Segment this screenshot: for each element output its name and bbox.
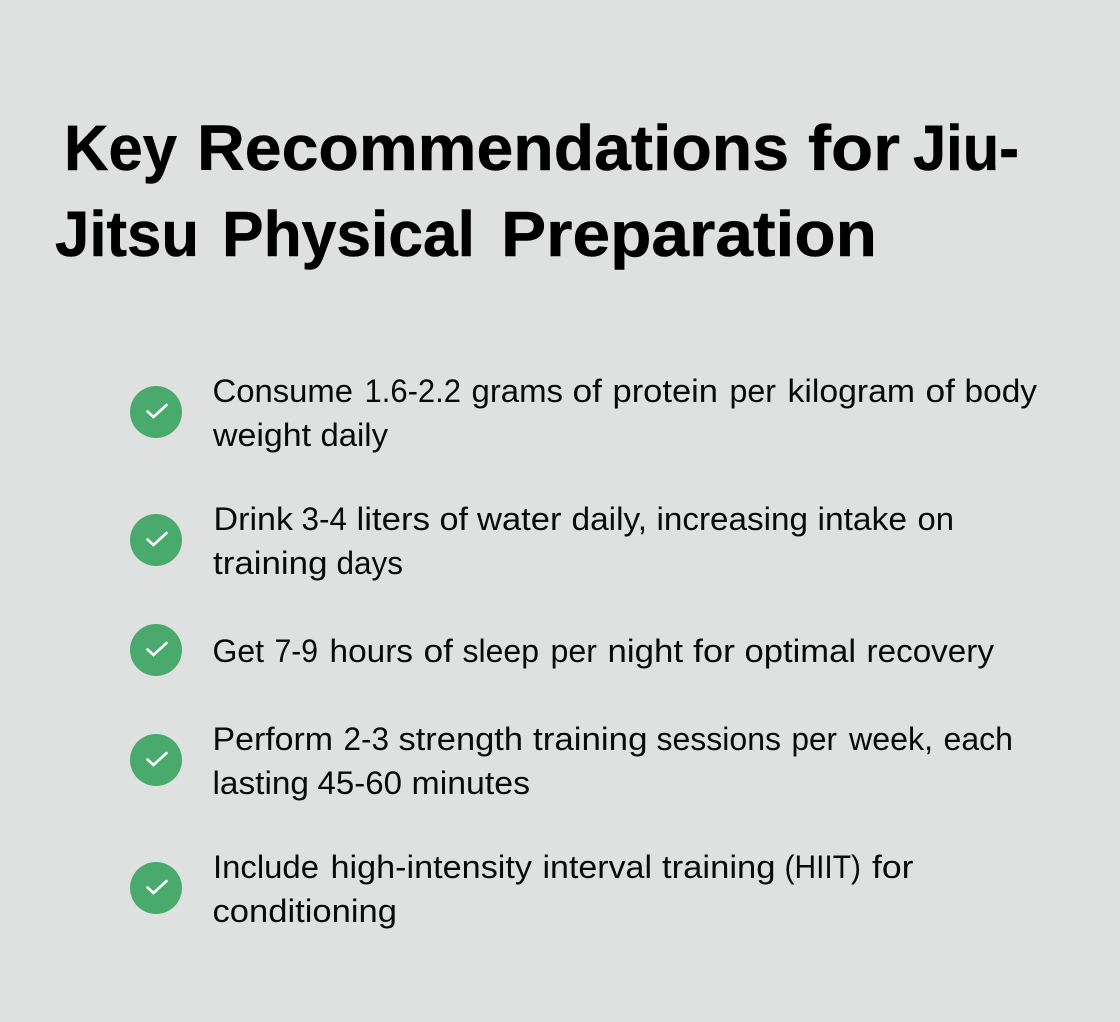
item: strength training: each	[944, 721, 1013, 757]
item: water: water	[476, 501, 562, 537]
item: protein	[130, 373, 1037, 453]
item: water: 3-4	[302, 501, 347, 537]
item: sleep: night	[608, 633, 683, 669]
item: strength training: per	[792, 721, 837, 757]
item: strength training: strength	[398, 721, 523, 757]
item: HIIT: conditioning	[212, 893, 397, 929]
item: strength training: training	[533, 721, 648, 757]
item: strength training: week,	[848, 721, 933, 757]
item: strength training: lasting	[212, 765, 309, 801]
item: protein: of	[926, 373, 955, 409]
title: Key	[64, 112, 177, 184]
item: water: on	[918, 501, 954, 537]
item: HIIT: interval	[542, 849, 652, 885]
item: sleep: hours	[330, 633, 413, 669]
item: protein: daily	[320, 417, 388, 453]
title: Preparation	[501, 198, 877, 270]
item: strength training: sessions	[656, 721, 781, 757]
item: protein: per	[730, 373, 776, 409]
item: strength training: 2-3	[344, 721, 389, 757]
item: water: intake	[818, 501, 907, 537]
title	[55, 112, 1019, 270]
item: water: days	[336, 545, 403, 581]
item: protein: weight	[212, 417, 311, 453]
item: sleep: 7-9	[274, 633, 318, 669]
item: HIIT: training	[662, 849, 776, 885]
item: sleep: sleep	[462, 633, 539, 669]
item: strength training: 45-60	[318, 765, 402, 801]
item: water: liters	[356, 501, 430, 537]
item: sleep: of	[424, 633, 453, 669]
item: water: of	[440, 501, 468, 537]
item: water: daily,	[572, 501, 647, 537]
item: strength training: minutes	[412, 765, 530, 801]
item: HIIT	[130, 849, 914, 929]
item: strength training	[130, 721, 1013, 801]
item: water: Drink	[214, 501, 294, 537]
title: for	[808, 112, 900, 184]
title: Recommendations	[197, 112, 789, 184]
item: strength training: Perform	[212, 721, 333, 757]
item: protein: kilogram	[788, 373, 915, 409]
item: sleep	[130, 624, 994, 676]
item: sleep: for	[693, 633, 735, 669]
item: sleep: per	[550, 633, 597, 669]
checklist	[130, 373, 1037, 929]
item: sleep: recovery	[866, 633, 994, 669]
title: Jitsu	[55, 198, 199, 270]
item: protein: 1.6-2.2	[364, 373, 461, 409]
item: protein: of	[572, 373, 602, 409]
item: sleep: Get	[212, 633, 264, 669]
item: HIIT: Include	[213, 849, 319, 885]
item: water: increasing	[656, 501, 808, 537]
item: HIIT: high-intensity	[330, 849, 532, 885]
item: HIIT: (HIIT)	[784, 849, 861, 885]
item: protein: Consume	[212, 373, 353, 409]
item: protein: body	[964, 373, 1037, 409]
item: HIIT: for	[872, 849, 914, 885]
title: Jiu-	[913, 112, 1019, 184]
item: protein: protein	[612, 373, 718, 409]
item: sleep: optimal	[744, 633, 856, 669]
item: water	[130, 501, 954, 581]
item: protein: grams	[472, 373, 563, 409]
title: Physical	[222, 198, 475, 270]
item: water: training	[213, 545, 328, 581]
